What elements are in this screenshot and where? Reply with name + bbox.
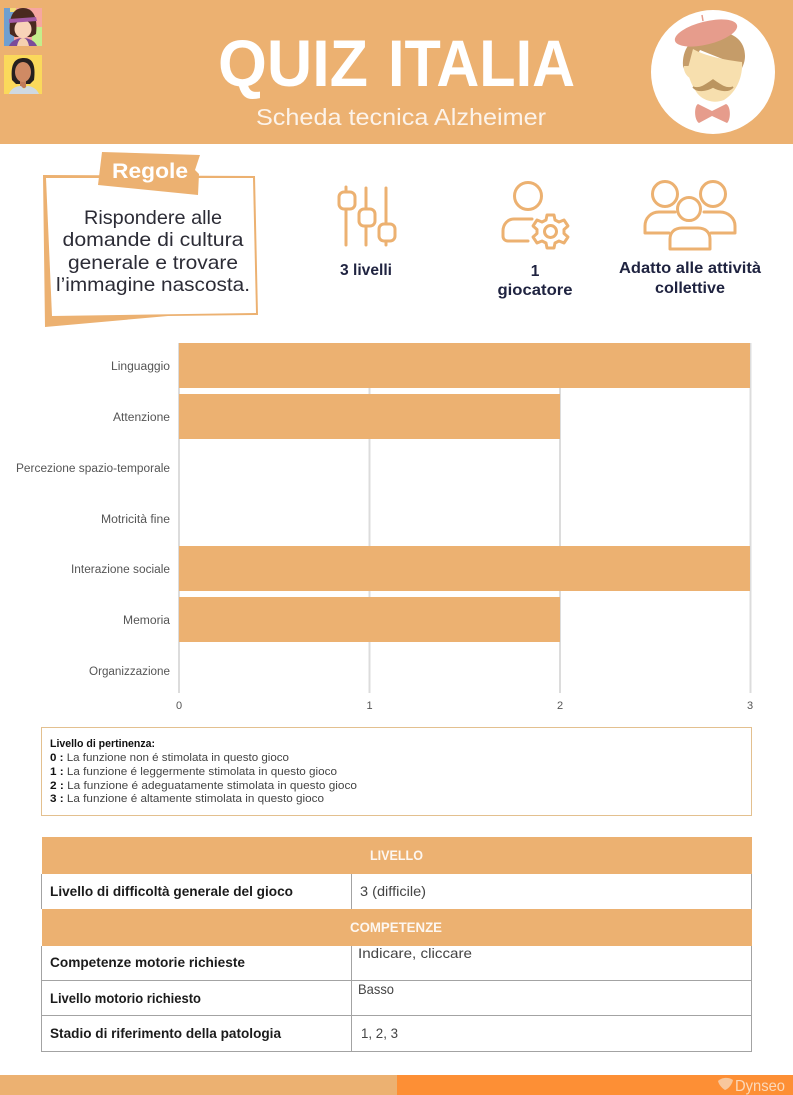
- table header: level: [42, 837, 752, 874]
- rules text: domande di cultura: [62, 229, 244, 251]
- legend box: 3 : La funzione é altamente stimolata in questo gioco: [50, 793, 324, 805]
- table rows and borders: [42, 874, 752, 1052]
- table row: difficulty: 3 (difficile): [360, 883, 426, 899]
- table row: motor skills: Competenze motorie richieste: [50, 954, 245, 970]
- chart category labels: Memoria: [123, 615, 171, 627]
- table row: motor skills: [50, 945, 472, 970]
- legend box: [42, 728, 752, 816]
- footer band: [0, 1075, 793, 1095]
- collective label: Adatto alle attività: [619, 260, 761, 277]
- collective label: collettive: [655, 280, 725, 297]
- rules text: l’immagine nascosta.: [56, 274, 250, 296]
- chart category labels: Motricità fine: [101, 514, 170, 526]
- chart category labels: Attenzione: [113, 412, 170, 424]
- legend box: 1 : La funzione é leggermente stimolata in questo gioco: [50, 766, 337, 778]
- title: [218, 26, 575, 100]
- table row: pathology stage: Stadio di riferimento della patologia: [50, 1025, 281, 1041]
- table: [42, 837, 752, 1052]
- chart axis values: 2: [557, 700, 563, 712]
- table header: skills: [42, 909, 752, 946]
- rules text: Rispondere alle: [84, 207, 222, 229]
- player label: [498, 263, 573, 299]
- chart axis values: 3: [747, 700, 753, 712]
- icon: man with beret: [651, 10, 775, 134]
- header banner: [0, 0, 793, 144]
- table header: level: LIVELLO: [370, 847, 423, 863]
- chart axis values: 0: [176, 700, 182, 712]
- player label: 1: [531, 263, 540, 280]
- collective label: [619, 260, 761, 297]
- panel: rules: [43, 152, 258, 327]
- table row: pathology stage: [50, 1025, 398, 1041]
- table row: difficulty: Livello di difficoltà generale del gioco: [50, 883, 293, 899]
- levels label: 3 livelli: [340, 262, 392, 279]
- icon: male avatar: [4, 55, 42, 94]
- chart category labels: Organizzazione: [89, 666, 170, 678]
- icon: female avatar: [4, 8, 42, 46]
- icon: player with gear: [503, 182, 568, 248]
- chart category labels: Percezione spazio-temporale: [16, 463, 170, 475]
- legend box: 0 : La funzione non é stimolata in questo gioco: [50, 752, 289, 764]
- icon: sliders: [339, 187, 395, 245]
- title: ITALIA: [388, 26, 575, 100]
- table row: motor skills: Indicare, cliccare: [358, 945, 472, 961]
- table row: motor level: [50, 981, 394, 1006]
- rules text: generale e trovare: [68, 252, 238, 274]
- chart category labels: Linguaggio: [111, 361, 170, 373]
- legend box: Livello di pertinenza:: [50, 738, 155, 750]
- rules tab: [98, 152, 200, 195]
- table row: motor level: Livello motorio richiesto: [50, 990, 201, 1006]
- bar chart: [16, 343, 753, 712]
- footer logo: [718, 1078, 785, 1095]
- chart axis values: 1: [366, 700, 373, 712]
- icon: group of people: [645, 182, 735, 249]
- table row: difficulty: [50, 883, 426, 899]
- chart gridlines: [179, 343, 750, 693]
- chart bars: [179, 343, 750, 642]
- table row: pathology stage: 1, 2, 3: [361, 1025, 398, 1041]
- chart category labels: Interazione sociale: [71, 564, 170, 576]
- rules tab: Regole: [112, 160, 188, 183]
- player label: giocatore: [498, 282, 573, 299]
- table header: skills: COMPETENZE: [350, 919, 442, 935]
- title: QUIZ: [218, 26, 368, 100]
- legend box: 2 : La funzione é adeguatamente stimolata in questo gioco: [50, 780, 357, 792]
- table row: motor level: Basso: [358, 981, 394, 997]
- subtitle: Scheda tecnica Alzheimer: [256, 104, 546, 130]
- chart category labels: [16, 361, 171, 678]
- chart axis values: [176, 700, 753, 712]
- rules text: [56, 207, 250, 296]
- footer logo: Dynseo: [735, 1078, 785, 1095]
